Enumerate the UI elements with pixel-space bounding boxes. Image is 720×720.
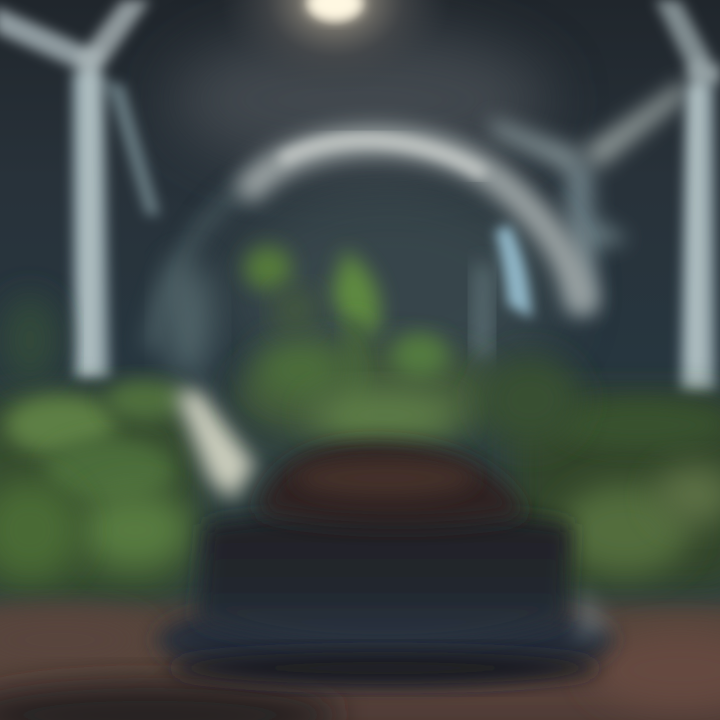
glow: sun at top — [220, 0, 450, 95]
wind turbine: left — [0, 0, 160, 378]
vegetation: left bushes — [0, 295, 195, 600]
haze: pale sky behind dome — [170, 30, 550, 170]
wind turbine: middle distant — [490, 80, 688, 310]
wind turbine: right — [655, 0, 720, 392]
plant: central green seedling — [235, 246, 580, 445]
ground: soil foreground — [0, 605, 720, 720]
glass dome: bright arc — [150, 140, 582, 400]
vegetation: right bushes — [515, 395, 720, 590]
soil: mound in pot — [258, 443, 525, 526]
path: bright light strip — [175, 390, 255, 500]
pot: dark dish and bowl — [157, 510, 613, 684]
